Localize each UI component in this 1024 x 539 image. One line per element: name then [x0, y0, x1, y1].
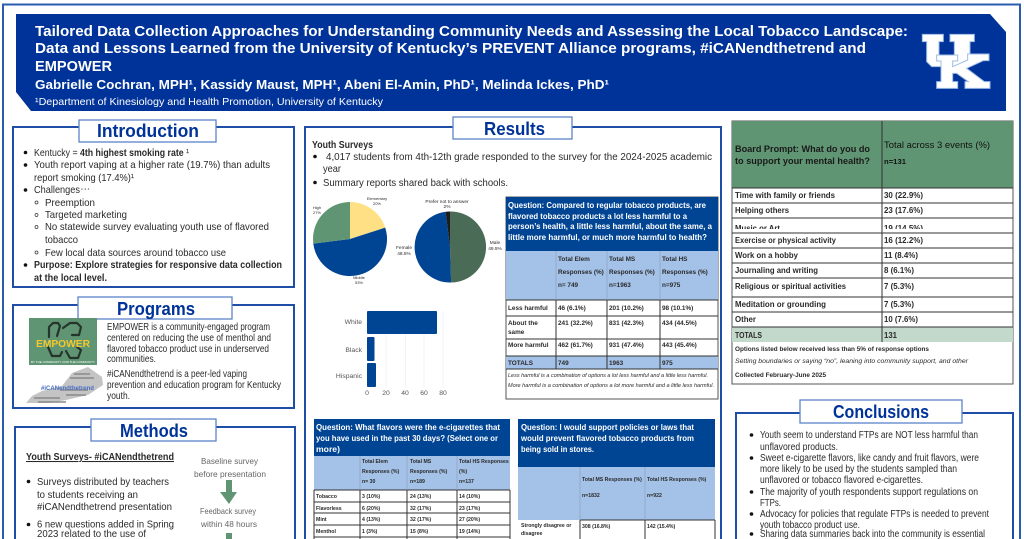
table: perceived harm: flavored tobacco products a lot less harmful to a	[508, 211, 687, 221]
icon: Kentucky word cloud: #iCANendthetrend	[41, 386, 94, 392]
table: policy support: Strongly disagree or	[521, 523, 571, 529]
pie chart: gender	[396, 199, 503, 283]
introduction bullets: Youth report vaping at a higher rate (19.7%) than adults	[34, 159, 270, 171]
table: board prompt mental health: 16 (12.2%)	[884, 235, 923, 245]
methods bullets: 6 new questions added in Spring	[37, 518, 174, 530]
table: e-cigarette flavors: n=137	[459, 479, 474, 485]
conclusions bullets: FTPs.	[760, 498, 781, 509]
youth surveys summary: 4,017 students from 4th-12th grade responded to the survey for the 2024-2025 academic	[326, 151, 712, 163]
table: e-cigarette flavors: you have used in the past 30 days? (Select one or	[316, 433, 499, 443]
panel: conclusions	[736, 400, 1013, 539]
conclusions bullets: Sweet e-cigarette flavors, like candy and fruit flavors, were	[760, 453, 979, 464]
arrow: baseline to feedback	[220, 480, 237, 504]
table: policy support: n=1832	[582, 493, 600, 499]
table: policy support: disagree	[521, 531, 542, 537]
table: perceived harm: 434 (44.5%)	[662, 320, 697, 327]
survey flow diagram: before presentation	[194, 469, 266, 479]
bar chart: race and ethnicity	[336, 311, 447, 397]
youth surveys summary: year	[323, 163, 341, 175]
icon: EMPOWER logo	[29, 318, 97, 365]
introduction bullets: Few local data sources around tobacco use	[45, 247, 226, 259]
pie chart: grade level: Elementary	[367, 196, 387, 201]
table: board prompt mental health: 7 (5.3%)	[884, 299, 914, 309]
table: board prompt mental health: Other	[735, 314, 757, 324]
table: policy support: would prevent flavored tobacco products from	[520, 433, 694, 443]
youth surveys summary: Youth Surveys	[312, 139, 373, 151]
conclusions bullets: unflavored or tobacco flavored e-cigarettes.	[760, 475, 923, 486]
table: e-cigarette flavors: Menthol	[316, 529, 336, 535]
survey flow diagram	[194, 456, 266, 539]
table: policy support: 142 (15.4%)	[647, 524, 676, 530]
table: perceived harm: Total Elem	[558, 256, 590, 263]
heading: methods: Methods	[120, 421, 188, 441]
table: board prompt mental health: Music or Art	[735, 223, 780, 233]
heading: introduction: Introduction	[97, 121, 199, 141]
table: perceived harm: same	[508, 329, 525, 336]
table: perceived harm: 749	[558, 360, 569, 367]
poster title: EMPOWER	[35, 59, 113, 75]
table: board prompt mental health: 131	[884, 330, 897, 340]
methods subheading: Youth Surveys- #iCANendthetrend	[26, 451, 174, 463]
programs description: prevention and education program for Kentucky	[107, 379, 282, 391]
table: e-cigarette flavors: Responses (%)	[362, 469, 399, 475]
bar chart: race and ethnicity: 20	[382, 390, 390, 397]
table: board prompt mental health: Board Prompt: What do you do	[735, 144, 870, 155]
introduction bullets: at the local level.	[34, 272, 107, 284]
introduction bullets: 2, 3, 4	[81, 187, 90, 191]
table: board prompt mental health: 7 (5.3%)	[884, 281, 914, 291]
table: board prompt mental health: Setting boundaries or saying “no”, leaning into community support, and other	[735, 358, 969, 365]
table: board prompt mental health: Helping others	[735, 205, 789, 215]
poster title: Data and Lessons Learned from the University of Kentucky’s PREVENT Alliance programs, #iCANendthetrend and	[35, 41, 866, 57]
table: perceived harm: 975	[662, 360, 673, 367]
table: board prompt mental health: 19 (14.5%)	[884, 223, 923, 233]
table: perceived harm: About the	[508, 320, 538, 327]
table: perceived harm: Less harmful	[508, 305, 548, 312]
pie chart: gender: Prefer not to answer	[425, 199, 469, 205]
pie chart: grade level	[313, 196, 387, 285]
affiliation: ¹Department of Kinesiology and Health Promotion, University of Kentucky	[35, 96, 384, 108]
programs description: centered on reducing the use of menthol and	[107, 332, 271, 344]
introduction bullets: Kentucky = 4th highest smoking rate ¹	[34, 147, 189, 159]
table: e-cigarette flavors: Total HS Responses	[459, 459, 509, 465]
pie chart: grade level: 27%	[313, 210, 321, 215]
poster title: Tailored Data Collection Approaches for Understanding Community Needs and Assessing the Local Tobacco Landscape:	[35, 24, 908, 40]
table: board prompt mental health: n=131	[884, 159, 906, 166]
youth surveys summary	[312, 139, 712, 189]
bar chart: race and ethnicity: 80	[439, 390, 447, 397]
pie chart: gender: 48.5%	[397, 251, 412, 257]
table: perceived harm: 443 (45.4%)	[662, 342, 697, 349]
icon: EMPOWER logo: EMPOWER	[36, 339, 91, 350]
heading: programs: Programs	[117, 299, 195, 319]
table: policy support: 308 (16.8%)	[582, 524, 611, 530]
authors: Gabrielle Cochran, MPH¹, Kassidy Maust, MPH¹, Abeni El-Amin, PhD¹, Melinda Ickes, PhD¹	[35, 78, 609, 92]
table: board prompt mental health: Collected February-June 2025	[735, 372, 826, 379]
introduction bullets: Targeted marketing	[45, 209, 127, 221]
table: perceived harm: person’s health, a little less harmful, about the same, a	[508, 221, 712, 231]
table: perceived harm: More harmful	[508, 342, 549, 349]
table: perceived harm: n=975	[662, 282, 681, 289]
table: policy support: being sold in stores.	[521, 444, 594, 454]
table: perceived harm: Responses (%)	[662, 269, 708, 276]
programs description: youth.	[107, 390, 130, 402]
survey flow diagram: within 48 hours	[200, 519, 257, 529]
bar chart: race and ethnicity: 40	[401, 390, 409, 397]
table: perceived harm: Question: Compared to regular tobacco products, are	[508, 200, 706, 210]
table: policy support	[518, 419, 715, 539]
pie chart: grade level: High	[313, 205, 321, 210]
table: e-cigarette flavors: n=189	[410, 479, 425, 485]
introduction bullets: Challenges	[34, 184, 80, 196]
programs description: #iCANendthetrend is a peer-led vaping	[107, 368, 247, 380]
survey flow diagram: Baseline survey	[201, 456, 259, 466]
introduction bullets: tobacco	[45, 234, 78, 246]
table: e-cigarette flavors: n= 30	[362, 479, 376, 485]
table: e-cigarette flavors: 6 (20%)	[362, 506, 380, 512]
pie chart: gender: Male	[490, 240, 501, 246]
table: policy support: Total MS Responses (%)	[582, 477, 642, 483]
table: e-cigarette flavors: more)	[316, 444, 340, 454]
table: board prompt mental health: Exercise or physical activity	[735, 235, 836, 245]
pie chart: grade level: 20%	[373, 201, 381, 206]
icon: UK logo	[922, 34, 990, 88]
table: e-cigarette flavors: Total MS	[410, 459, 432, 465]
introduction bullets: Preemption	[45, 197, 95, 209]
conclusions bullets: Advocacy for policies that regulate FTPs is needed to prevent	[760, 509, 989, 520]
pie chart: gender: 2%	[444, 204, 451, 210]
table: perceived harm: 241 (32.2%)	[558, 320, 593, 327]
table: board prompt mental health: 11 (8.4%)	[884, 250, 918, 260]
table: e-cigarette flavors: 19 (14%)	[459, 529, 480, 535]
table: e-cigarette flavors: 1 (3%)	[362, 529, 378, 535]
table: perceived harm: n= 749	[558, 282, 579, 289]
panel: results	[305, 117, 721, 539]
table: perceived harm: 1963	[609, 360, 624, 367]
table: perceived harm: 931 (47.4%)	[609, 342, 644, 349]
conclusions bullets: The majority of youth respondents support regulations on	[760, 487, 978, 498]
table: e-cigarette flavors: Total Elem	[362, 459, 388, 465]
table: board prompt mental health: 30 (22.9%)	[884, 190, 923, 200]
programs description: EMPOWER is a community-engaged program	[107, 321, 270, 333]
table: perceived harm	[506, 197, 718, 399]
methods bullets: #iCANendthetrend presentation	[37, 501, 172, 513]
survey flow diagram: Feedback survey	[200, 506, 257, 516]
table: perceived harm: Responses (%)	[558, 269, 604, 276]
table: perceived harm: 46 (6.1%)	[558, 305, 586, 312]
pie chart: gender: Female	[396, 245, 412, 251]
methods bullets: to students receiving an	[37, 489, 138, 501]
introduction bullets: No statewide survey evaluating youth use of flavored	[45, 221, 269, 233]
table: e-cigarette flavors: (%)	[459, 469, 467, 475]
programs description: communities.	[107, 353, 156, 365]
bar chart: race and ethnicity: Hispanic	[336, 373, 363, 380]
table: board prompt mental health	[732, 121, 1013, 384]
table: perceived harm: TOTALS	[508, 360, 534, 367]
pie chart: grade level: Middle	[353, 275, 366, 280]
table: board prompt mental health: TOTALS	[735, 330, 762, 340]
icon: Kentucky word cloud	[26, 367, 103, 403]
table: board prompt mental health: 8 (6.1%)	[884, 265, 914, 275]
table: e-cigarette flavors: 23 (17%)	[459, 506, 480, 512]
table: board prompt mental health: Options listed below received less than 5% of response options	[735, 346, 929, 353]
table: perceived harm: More harmful is a combination of options a lot more harmful and a little less harmful.	[508, 383, 714, 389]
poster title	[35, 24, 908, 75]
table: perceived harm: 462 (61.7%)	[558, 342, 593, 349]
table: board prompt mental health: Work on a hobby	[735, 250, 798, 260]
programs description	[107, 321, 282, 402]
table: e-cigarette flavors: Mint	[316, 517, 327, 523]
table: e-cigarette flavors: 14 (10%)	[459, 494, 480, 500]
table: e-cigarette flavors: 24 (13%)	[410, 494, 431, 500]
introduction bullets: Purpose: Explore strategies for responsive data collection	[34, 259, 282, 271]
table: e-cigarette flavors: 15 (8%)	[410, 529, 428, 535]
conclusions bullets: youth tobacco product use.	[760, 520, 860, 531]
conclusions bullets: unflavored products.	[760, 442, 838, 453]
panel: methods	[15, 419, 295, 539]
table: board prompt mental health: Journaling and writing	[735, 265, 818, 275]
table: board prompt mental health: Total across 3 events (%)	[884, 140, 990, 151]
methods bullets: Surveys distributed by teachers	[37, 476, 169, 488]
table: e-cigarette flavors: 3 (10%)	[362, 494, 380, 500]
bar chart: race and ethnicity: White	[345, 319, 362, 326]
bar chart: race and ethnicity: 0	[365, 390, 369, 397]
table: board prompt mental health: 23 (17.6%)	[884, 205, 923, 215]
table: board prompt mental health: Meditation or grounding	[735, 299, 826, 309]
programs description: flavored tobacco product use in underserved	[107, 343, 269, 355]
youth surveys summary: Summary reports shared back with schools.	[323, 177, 508, 189]
conclusions bullets	[750, 430, 989, 539]
table: policy support: Total HS Responses (%)	[647, 477, 707, 483]
heading: results: Results	[484, 119, 545, 139]
table: e-cigarette flavors	[314, 419, 510, 539]
table: board prompt mental health: Time with family or friends	[735, 190, 835, 200]
table: e-cigarette flavors: Question: What flavors were the e-cigarettes that	[316, 422, 500, 432]
panel: introduction	[13, 120, 294, 287]
table: e-cigarette flavors: 32 (17%)	[410, 517, 431, 523]
table: perceived harm: n=1963	[609, 282, 631, 289]
table: perceived harm: little more harmful, or much more harmful to health?	[508, 232, 707, 242]
table: e-cigarette flavors: Responses (%)	[410, 469, 447, 475]
bar chart: race and ethnicity: Black	[345, 347, 363, 354]
bar chart: race and ethnicity: 60	[420, 390, 428, 397]
table: perceived harm: Less harmful is a combination of options a lot less harmful and a little less harmful.	[508, 373, 708, 379]
table: e-cigarette flavors: Flavorless	[316, 506, 342, 512]
table: perceived harm: Total HS	[662, 256, 688, 263]
table: board prompt mental health: 10 (7.6%)	[884, 314, 918, 324]
introduction bullets	[24, 147, 282, 284]
panel: programs	[13, 297, 294, 408]
table: perceived harm: Responses (%)	[609, 269, 655, 276]
pie chart: grade level: 53%	[355, 280, 363, 285]
table: board prompt mental health: Religious or spiritual activities	[735, 281, 846, 291]
conclusions bullets: more likely to be used by the students sampled than	[760, 464, 957, 475]
table: perceived harm: 201 (10.2%)	[609, 305, 644, 312]
arrow: feedback continuing	[226, 533, 232, 539]
pie chart: gender: 49.5%	[488, 246, 503, 252]
methods bullets	[27, 476, 174, 539]
heading: conclusions: Conclusions	[833, 402, 929, 422]
table: perceived harm: Total MS	[609, 256, 636, 263]
table: e-cigarette flavors: 32 (17%)	[410, 506, 431, 512]
conclusions bullets: Youth seem to understand FTPs are NOT less harmful than	[760, 430, 978, 441]
table: e-cigarette flavors: 27 (20%)	[459, 517, 480, 523]
table: perceived harm: 98 (10.1%)	[662, 305, 693, 312]
table: perceived harm: 831 (42.3%)	[609, 320, 644, 327]
table: e-cigarette flavors: Tobacco	[316, 494, 337, 500]
table: board prompt mental health: to support your mental health?	[735, 156, 870, 167]
icon: EMPOWER logo: BY THE COMMUNITY. FOR THE COMMUNITY	[31, 360, 95, 364]
table: e-cigarette flavors: 4 (13%)	[362, 517, 380, 523]
header banner	[16, 14, 1006, 111]
table: policy support: Question: I would support policies or laws that	[521, 422, 694, 432]
table: policy support: n=922	[647, 493, 662, 499]
introduction bullets: report smoking (17.4%)¹	[34, 172, 134, 184]
